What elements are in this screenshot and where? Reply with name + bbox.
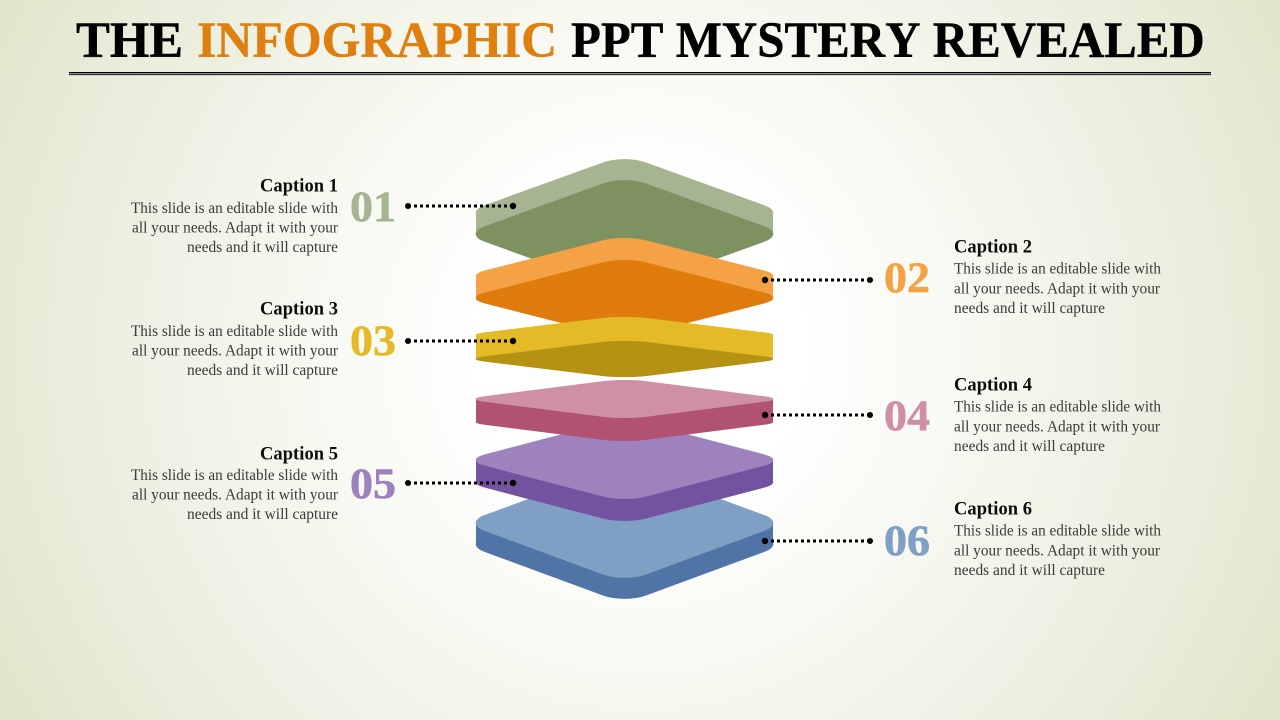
caption 4 text: needs and it will capture bbox=[954, 438, 1105, 455]
caption 2 text: all your needs. Adapt it with your bbox=[954, 280, 1161, 298]
number 04: 04 bbox=[884, 391, 930, 440]
caption 5 text: This slide is an editable slide with bbox=[131, 467, 338, 484]
caption 4 text: all your needs. Adapt it with your bbox=[954, 418, 1161, 436]
caption 6 text: This slide is an editable slide with bbox=[954, 522, 1161, 540]
caption 2 text: Caption 2 bbox=[954, 238, 1032, 258]
caption 1 text bbox=[131, 176, 339, 256]
caption 4 text: This slide is an editable slide with bbox=[954, 398, 1161, 416]
connector 03 bbox=[405, 338, 516, 344]
connector 02 bbox=[762, 277, 873, 283]
stacked layers diagram bbox=[463, 155, 786, 603]
connector 06 bbox=[762, 538, 873, 544]
number 01: 01 bbox=[350, 182, 396, 231]
caption 5 text: needs and it will capture bbox=[187, 506, 338, 523]
connector 04 bbox=[762, 412, 873, 418]
layer 4: pink bbox=[463, 378, 786, 443]
connector 05 bbox=[405, 480, 516, 486]
caption 1 text: needs and it will capture bbox=[187, 239, 338, 256]
title: INFOGRAPHIC bbox=[197, 12, 557, 68]
caption 2 text: This slide is an editable slide with bbox=[954, 260, 1161, 278]
caption 3 text: needs and it will capture bbox=[187, 362, 338, 379]
connector 01 bbox=[405, 203, 516, 209]
caption 3 text bbox=[131, 300, 339, 379]
caption 6 text bbox=[954, 500, 1161, 579]
number 03: 03 bbox=[350, 316, 396, 365]
caption 3 text: all your needs. Adapt it with your bbox=[132, 342, 339, 360]
caption 1 text: This slide is an editable slide with bbox=[131, 200, 338, 217]
layer 5: purple bbox=[463, 418, 786, 524]
title: THE bbox=[76, 13, 183, 69]
caption 1 text: all your needs. Adapt it with your bbox=[132, 220, 339, 236]
caption 4 text bbox=[954, 376, 1161, 455]
caption 5 text: Caption 5 bbox=[260, 444, 338, 464]
caption 5 text bbox=[131, 444, 339, 523]
caption 4 text: Caption 4 bbox=[954, 376, 1032, 396]
caption 6 text: all your needs. Adapt it with your bbox=[954, 542, 1161, 560]
number 05: 05 bbox=[350, 459, 396, 508]
number 06: 06 bbox=[884, 516, 930, 565]
layer 2: orange bbox=[463, 235, 786, 339]
number 02: 02 bbox=[884, 253, 930, 302]
caption 2 text: needs and it will capture bbox=[954, 300, 1105, 317]
caption 3 text: Caption 3 bbox=[260, 300, 338, 320]
caption 1 text: Caption 1 bbox=[260, 176, 338, 196]
caption 3 text: This slide is an editable slide with bbox=[131, 323, 338, 340]
layer 3: yellow bbox=[463, 315, 786, 379]
caption 5 text: all your needs. Adapt it with your bbox=[132, 486, 339, 504]
title: PPT MYSTERY REVEALED bbox=[571, 11, 1205, 68]
caption 6 text: needs and it will capture bbox=[954, 562, 1105, 579]
layer 6: blue bbox=[463, 464, 786, 603]
caption 2 text bbox=[954, 238, 1161, 317]
layer 1: green bbox=[463, 155, 786, 292]
caption 6 text: Caption 6 bbox=[954, 500, 1032, 520]
title bbox=[76, 11, 1205, 69]
